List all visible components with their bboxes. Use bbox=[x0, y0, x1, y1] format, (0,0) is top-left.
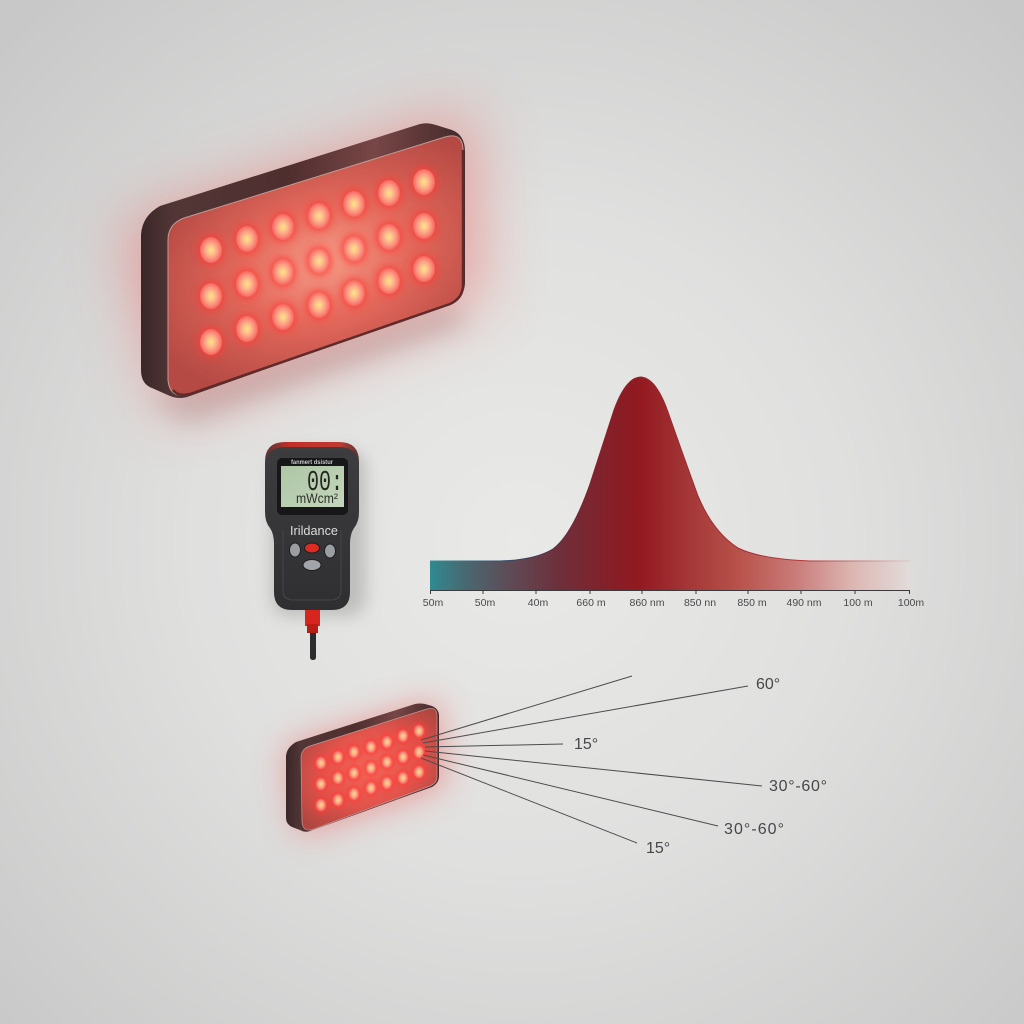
beam angle labels: 60° bbox=[756, 676, 780, 693]
beam angle labels: 30°-60° bbox=[724, 821, 784, 838]
meter cable bbox=[305, 608, 320, 660]
meter body bbox=[265, 447, 359, 610]
spectrum axis labels: 50m bbox=[475, 597, 495, 609]
spectrum axis labels: 100m bbox=[898, 597, 924, 609]
spectrum axis labels: 50m bbox=[423, 597, 443, 609]
spectrum axis labels: 850 m bbox=[737, 597, 767, 609]
meter shadow bbox=[272, 450, 366, 616]
small panel face bbox=[301, 708, 437, 830]
small panel casing bbox=[286, 704, 439, 832]
spectrum axis labels bbox=[423, 597, 924, 609]
LCD reading: 00: bbox=[307, 466, 343, 499]
beam angle labels: 30°-60° bbox=[769, 778, 827, 795]
panel casing bbox=[141, 123, 465, 398]
LED array bbox=[198, 167, 437, 357]
LCD display bbox=[281, 466, 344, 507]
small panel glow bbox=[285, 700, 445, 835]
small LED array bbox=[314, 723, 426, 813]
spectrum curve outline bbox=[430, 377, 910, 561]
spectrum axis labels: 660 m bbox=[576, 597, 606, 609]
spectrum chart bbox=[423, 377, 924, 609]
meter lower panel outline bbox=[283, 530, 341, 600]
panel face bbox=[168, 136, 463, 395]
meter screen bezel bbox=[277, 458, 348, 515]
LCD unit: mWcm² bbox=[296, 490, 338, 506]
small red LED panel bbox=[285, 700, 445, 835]
spectrum curve area bbox=[430, 377, 910, 590]
spectrum axis labels: 100 m bbox=[843, 597, 873, 609]
spectrum axis labels: 40m bbox=[528, 597, 548, 609]
spectrum axis labels: 860 nm bbox=[629, 597, 665, 609]
spectrum axis labels: 490 nm bbox=[786, 597, 822, 609]
beam angle labels bbox=[574, 676, 827, 857]
large red LED panel bbox=[125, 110, 480, 425]
panel inner edge shadow bbox=[173, 150, 463, 395]
meter red top cap bbox=[265, 442, 359, 470]
beam angle labels: 15° bbox=[574, 736, 598, 753]
panel glow bbox=[125, 110, 480, 410]
spectrum axis labels: 850 nn bbox=[684, 597, 716, 609]
spectrum axis bbox=[430, 590, 910, 594]
beam angle lines bbox=[421, 676, 762, 843]
irradiance meter bbox=[265, 442, 366, 660]
meter label: Irildance bbox=[290, 523, 338, 538]
meter bezel text: fanmert dsistur bbox=[291, 460, 334, 466]
beam angle labels: 15° bbox=[646, 840, 670, 857]
meter buttons bbox=[290, 543, 336, 570]
